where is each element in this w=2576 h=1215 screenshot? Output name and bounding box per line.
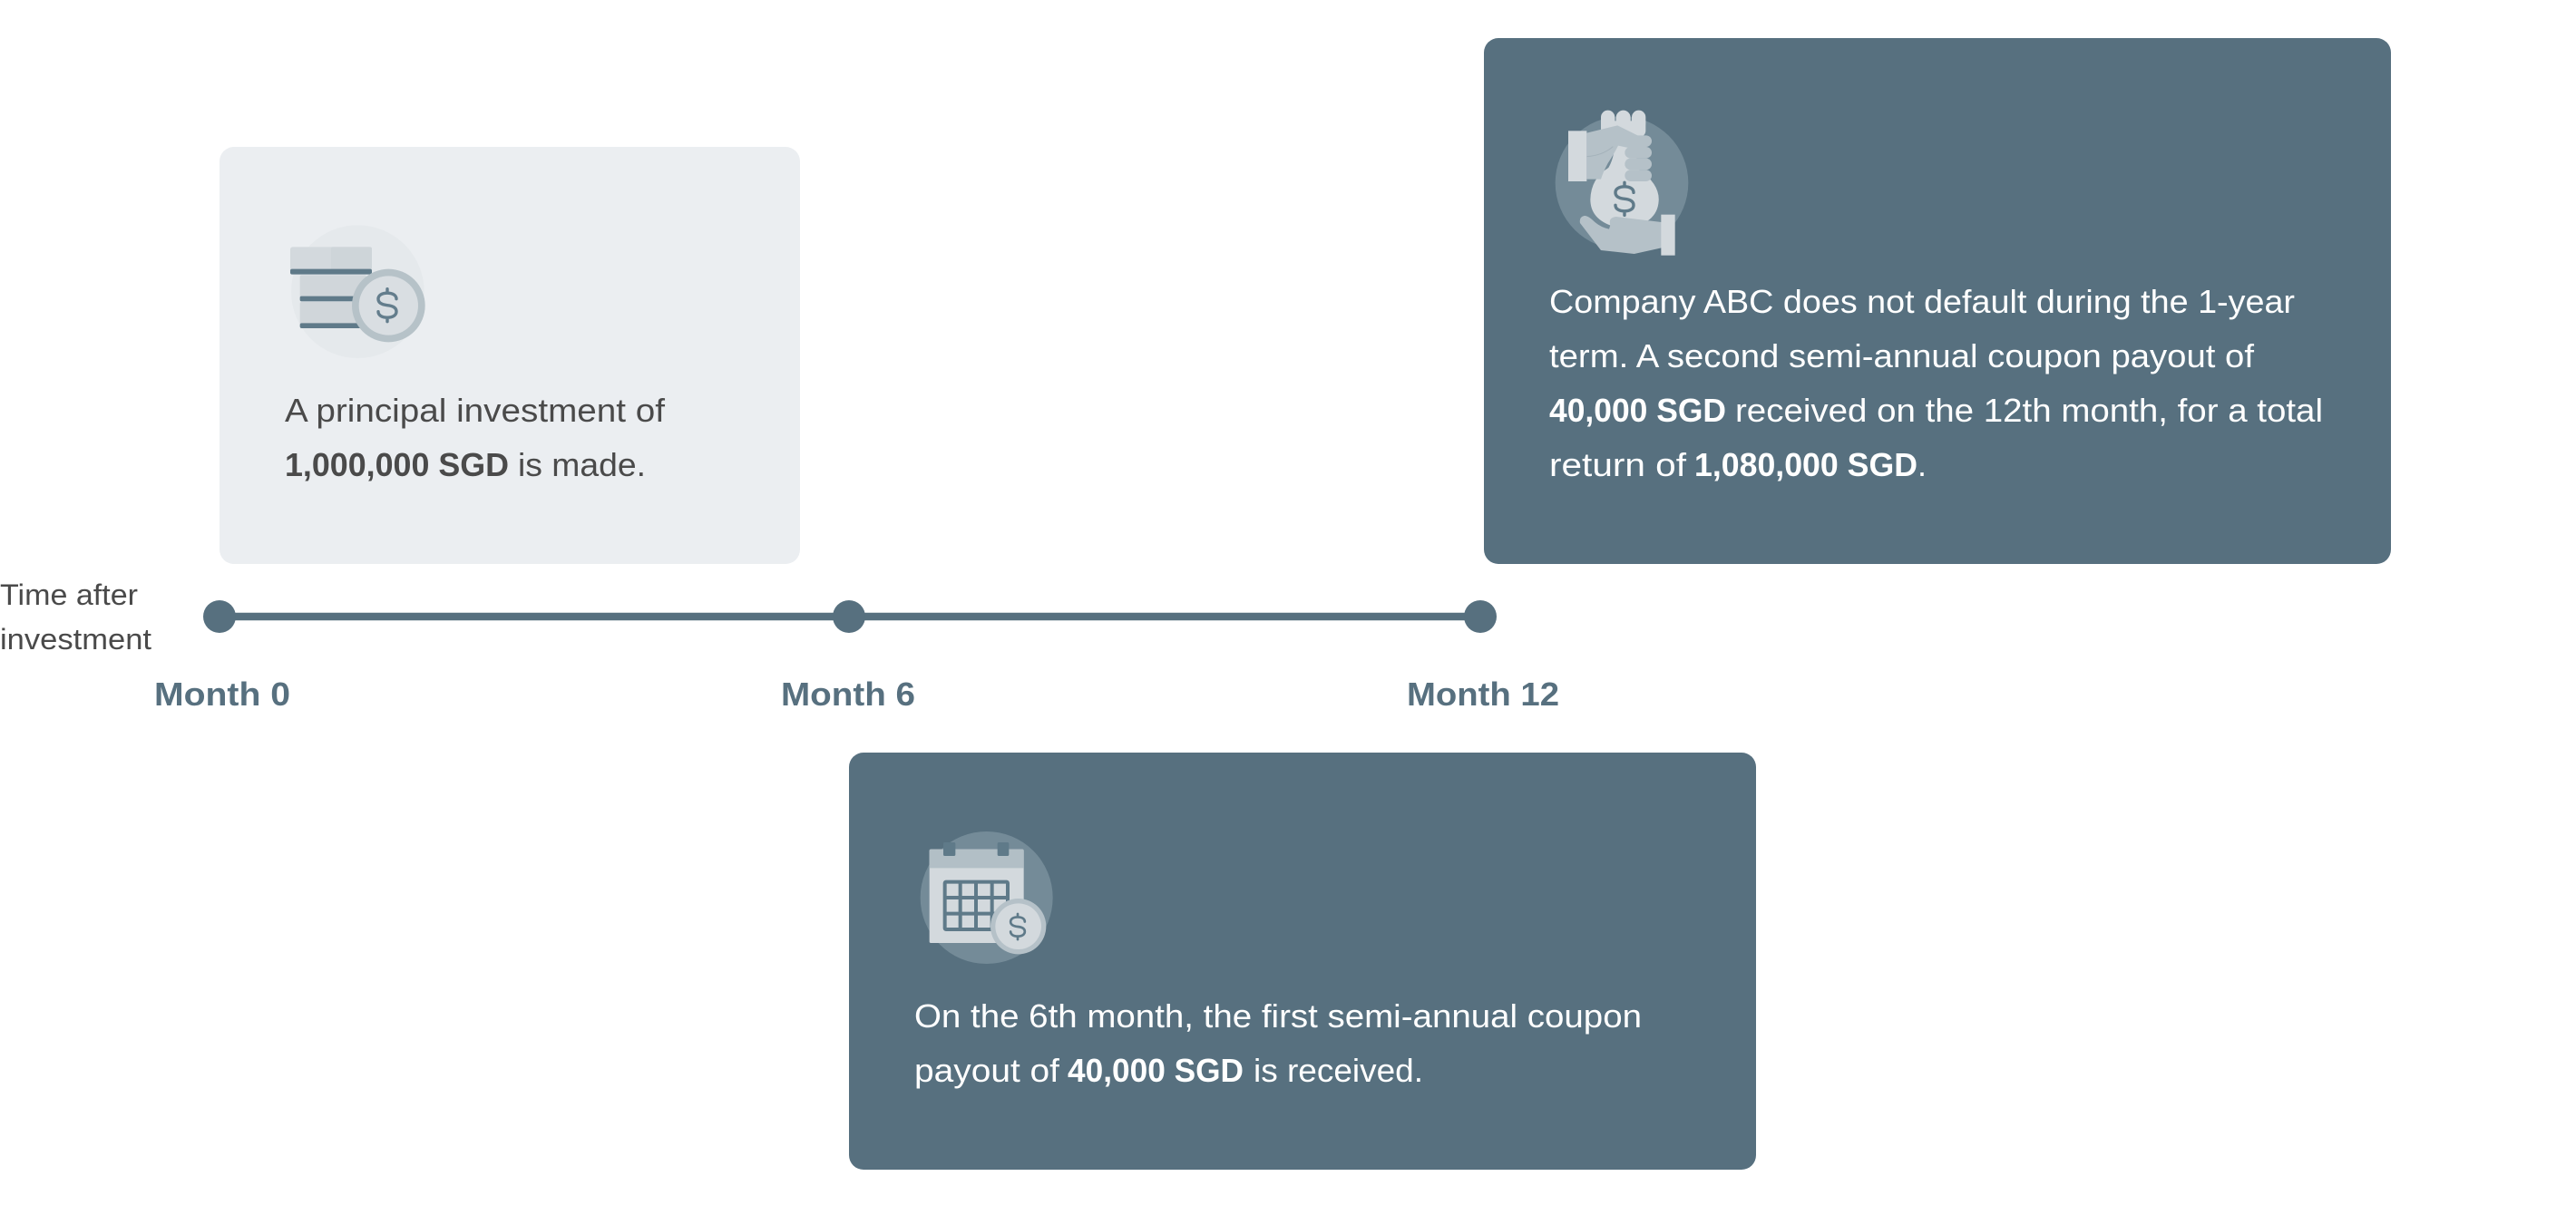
text: second coupon and total return: 40,000 SGD [1549,392,1726,429]
text: first coupon: payout of [914,1052,1060,1089]
icon: money bag passed between hands [1556,111,1688,256]
text: first coupon: 40,000 SGD [1068,1052,1244,1089]
text: second coupon and total return: 1,080,000 SGD [1694,446,1917,483]
text: second coupon and total return [1549,283,2323,483]
text: first coupon: is received. [1254,1052,1423,1089]
panel: month 12 second coupon and total return [1484,38,2391,564]
panel: month 6 first coupon [849,753,1756,1170]
text: first coupon: On the 6th month, the first semi-annual coupon [914,997,1642,1035]
panel: month 0 principal investment [220,147,800,564]
icon: calendar with coin [921,831,1053,964]
label: month 12: Month 12 [1407,676,1559,713]
text: principal investment: A principal investment of [285,392,666,429]
label: month 6: Month 6 [781,676,915,713]
text: principal investment: is made. [518,446,646,483]
text: first coupon [914,997,1642,1089]
icon: coin stack [290,225,425,358]
axis label: time after investment [0,578,151,656]
label: month 0: Month 0 [154,676,290,713]
text: principal investment [285,392,666,483]
axis label: time after investment: investment [0,623,151,656]
text: second coupon and total return: term. A second semi-annual coupon payout of [1549,337,2255,374]
text: principal investment: 1,000,000 SGD [285,446,509,483]
text: second coupon and total return: . [1917,446,1927,483]
text: second coupon and total return: return of [1549,446,1687,483]
text: second coupon and total return: Company ABC does not default during the 1-year [1549,283,2295,320]
text: second coupon and total return: received on the 12th month, for a total [1735,392,2323,429]
timeline axis [203,600,1497,633]
axis label: time after investment: Time after [0,578,138,611]
